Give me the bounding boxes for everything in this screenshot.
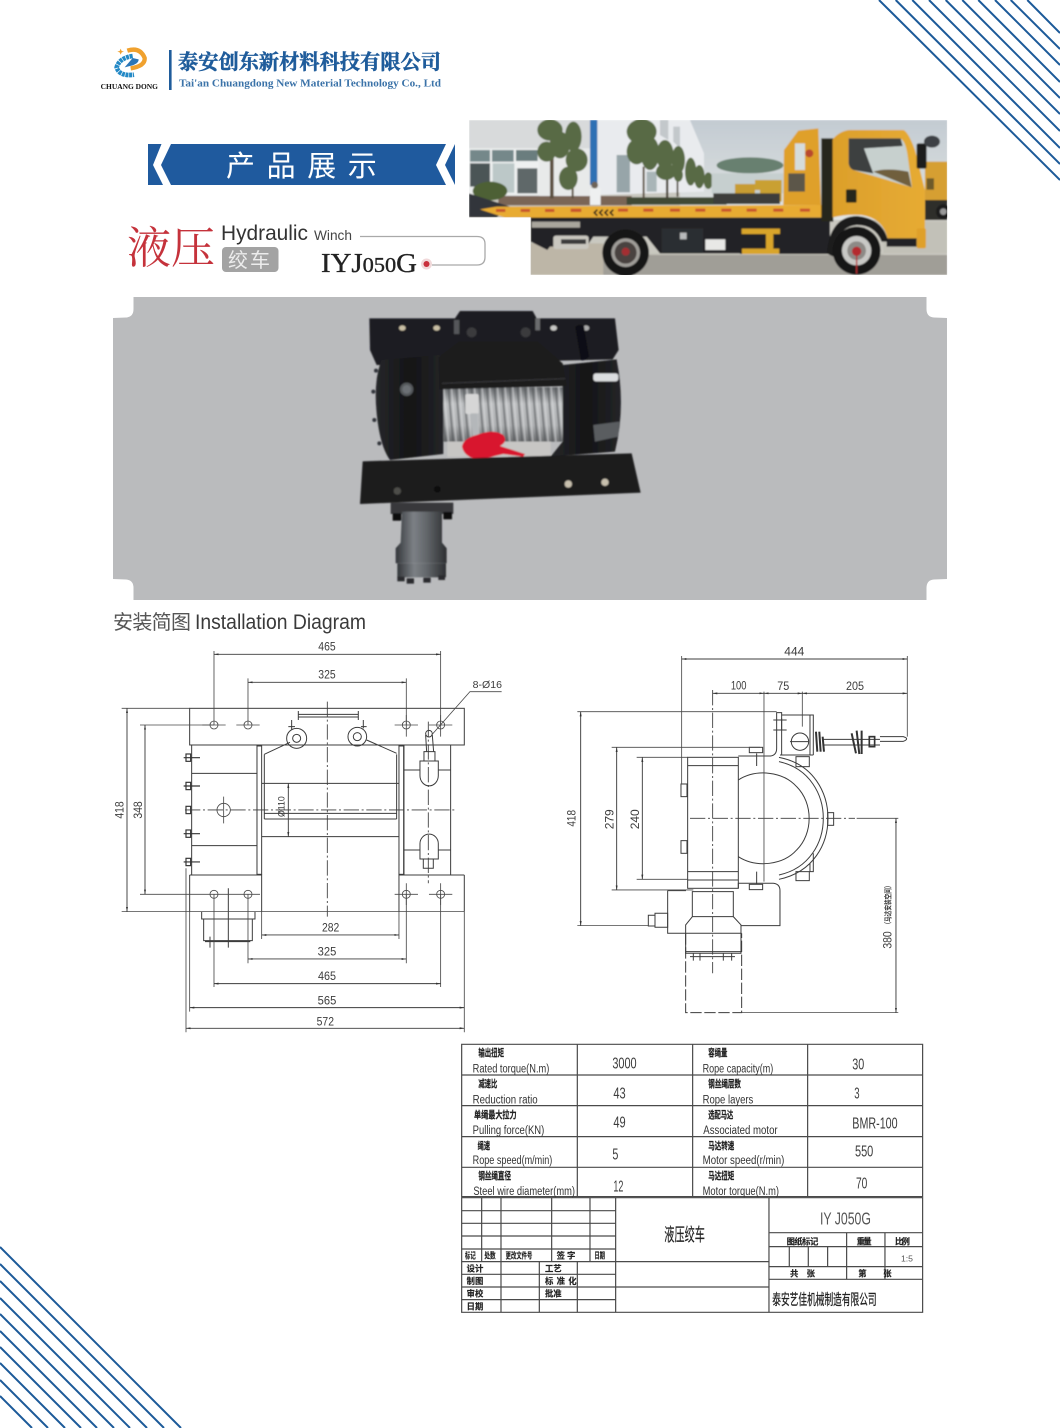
row: motor speed: 550 bbox=[855, 1144, 873, 1161]
centre lines bbox=[690, 690, 855, 973]
revision labels: 日期 bbox=[594, 1251, 605, 1261]
centre lines bbox=[185, 702, 455, 917]
factory building bbox=[469, 120, 727, 205]
panel: product photo background bbox=[113, 297, 947, 600]
revision labels: 处数 bbox=[484, 1251, 496, 1261]
logo wordmark: CHUANG DONG bbox=[101, 82, 158, 91]
row: rope capacity bbox=[703, 1047, 864, 1076]
row: rated torque: 3000 bbox=[612, 1055, 637, 1072]
dimension: 465 top: 465 bbox=[318, 641, 336, 654]
ground bbox=[926, 222, 947, 252]
row: steel wire diameter: 12 bbox=[613, 1179, 623, 1196]
heading: hydraulic winch bbox=[127, 222, 352, 273]
row: reduction ratio: 减速比 bbox=[478, 1077, 497, 1090]
row: motor torque: 70 bbox=[856, 1175, 867, 1192]
chassis bbox=[531, 217, 830, 254]
row: motor torque: 马达扭矩 bbox=[708, 1169, 734, 1182]
table grid bbox=[462, 1044, 923, 1197]
dimension: 418: 418 bbox=[114, 801, 127, 819]
row: associated motor: BMR-100 bbox=[852, 1115, 898, 1132]
manufacturer name: 泰安艺佳机械制造有限公司 bbox=[772, 1291, 877, 1308]
wire rope drum bbox=[440, 387, 564, 442]
row: steel wire diameter: Steel wire diameter(mm) bbox=[473, 1184, 575, 1198]
block headings: 图纸标记 bbox=[787, 1236, 819, 1246]
trees bbox=[473, 119, 783, 200]
cab gap bbox=[821, 138, 833, 222]
block headings bbox=[787, 1236, 913, 1279]
chart: side installation drawing bbox=[566, 645, 907, 1013]
section heading: installation diagram: 安装简图 bbox=[113, 611, 191, 634]
banner: product display: 产品展示 bbox=[226, 150, 388, 183]
row: rope layers bbox=[703, 1077, 860, 1106]
drum pivots and handle bbox=[287, 711, 367, 748]
dimension: 282 bbox=[262, 921, 399, 935]
row: rope layers: Rope layers bbox=[703, 1092, 753, 1106]
row: rope capacity: 30 bbox=[852, 1056, 864, 1073]
dimension: 465 bottom: 465 bbox=[318, 970, 336, 983]
company logo bbox=[101, 49, 158, 91]
row: rated torque bbox=[473, 1047, 637, 1076]
revision labels: 签字 bbox=[557, 1251, 575, 1261]
sign-off labels: 标准化 bbox=[545, 1276, 577, 1286]
heading: hydraulic winch: Winch bbox=[314, 227, 352, 243]
sign-off labels: 日期 bbox=[467, 1301, 483, 1311]
photo: hydraulic winch bbox=[360, 311, 641, 584]
row: rope speed bbox=[473, 1139, 618, 1167]
row: reduction ratio bbox=[473, 1077, 626, 1106]
row: motor speed bbox=[703, 1139, 873, 1167]
row: reduction ratio: Reduction ratio bbox=[473, 1092, 538, 1106]
icon: logo mark bbox=[117, 49, 145, 75]
truck cab bbox=[833, 130, 940, 248]
row: pulling force: Pulling force(KN) bbox=[473, 1123, 544, 1137]
background truck bbox=[925, 162, 951, 220]
decorative stripes: top right bbox=[879, 0, 1060, 180]
revision labels bbox=[465, 1251, 605, 1261]
heading: hydraulic winch: Hydraulic bbox=[221, 222, 308, 245]
top mounting plate bbox=[369, 311, 619, 365]
dimension: 110 diameter: Ø110 bbox=[277, 796, 287, 817]
dimension: 325 top: 325 bbox=[318, 669, 336, 682]
company name Chinese: 泰安创东新材料科技有限公司 bbox=[178, 51, 441, 74]
section heading: installation diagram: Installation Diagram bbox=[195, 611, 366, 634]
row: motor torque bbox=[703, 1169, 867, 1198]
dimension: 572: 572 bbox=[317, 1015, 334, 1028]
section heading: installation diagram bbox=[113, 611, 366, 634]
person bbox=[590, 182, 601, 205]
dimension: 380 motor space bbox=[882, 818, 896, 1013]
block headings: 共张 bbox=[790, 1269, 816, 1279]
hydraulic motor bbox=[391, 503, 453, 584]
revision labels: 更改文件号 bbox=[506, 1251, 532, 1261]
sign-off labels: 设计 bbox=[467, 1263, 484, 1273]
banner: product display bbox=[148, 144, 455, 185]
sign-off labels: 工艺 bbox=[545, 1263, 562, 1273]
row: rope speed: 绳速 bbox=[478, 1139, 490, 1152]
company name English: Tai'an Chuangdong New Material Technology Co., Ltd bbox=[179, 78, 441, 90]
drawing name: 液压绞车 bbox=[664, 1225, 705, 1245]
sign-off labels: 批准 bbox=[545, 1289, 562, 1299]
row: rope capacity: Rope capacity(m) bbox=[703, 1062, 773, 1076]
block headings: 1:5 bbox=[901, 1254, 913, 1264]
side lever bbox=[420, 730, 438, 868]
dimension: 444: 444 bbox=[784, 645, 805, 658]
block headings: 重量 bbox=[857, 1236, 872, 1246]
row: associated motor: 选配马达 bbox=[708, 1108, 734, 1121]
motor clearance envelope bbox=[686, 933, 742, 1013]
row: rope speed: Rope speed(m/min) bbox=[473, 1153, 552, 1167]
motor mount and motor bbox=[648, 891, 780, 961]
chart: front installation drawing bbox=[114, 641, 502, 1032]
extension lines bbox=[577, 656, 907, 1013]
centre bracket bbox=[439, 342, 567, 389]
lower mounting bar bbox=[360, 453, 641, 504]
dimension: 282: 282 bbox=[322, 921, 339, 934]
dimension: 240: 240 bbox=[629, 809, 642, 829]
parked car bbox=[469, 193, 510, 217]
row: rope layers: 3 bbox=[854, 1085, 860, 1102]
row: associated motor bbox=[703, 1108, 898, 1137]
motor outline bbox=[202, 888, 255, 948]
row: motor speed: 马达转速 bbox=[708, 1139, 735, 1152]
yellow side support bbox=[742, 229, 780, 254]
extension lines bbox=[122, 651, 464, 1032]
heading: hydraulic winch: 液压 bbox=[127, 224, 215, 273]
front wheel bbox=[827, 216, 888, 275]
left drum housing bbox=[371, 355, 443, 460]
brake lever bbox=[575, 324, 589, 360]
block headings: 比例 bbox=[895, 1236, 910, 1246]
row: steel wire diameter bbox=[473, 1169, 623, 1198]
dimension: 205 bbox=[802, 680, 907, 693]
distant yellow trucks bbox=[712, 173, 783, 204]
heading: hydraulic winch: 绞车 bbox=[228, 249, 272, 272]
block headings: 第张 bbox=[858, 1269, 892, 1279]
logo divider bar bbox=[169, 50, 172, 90]
row: rope layers: 钢丝绳层数 bbox=[708, 1077, 741, 1090]
side bolts bbox=[184, 754, 200, 866]
headboard bbox=[783, 128, 821, 205]
sign-off labels bbox=[467, 1263, 577, 1311]
sky bbox=[680, 120, 947, 220]
housing body bbox=[688, 713, 813, 926]
row: steel wire diameter: 钢丝绳直径 bbox=[478, 1169, 511, 1182]
mounting plates and body outline bbox=[190, 708, 464, 912]
dimension: 380 motor space: （马达安装空间） bbox=[883, 882, 893, 927]
dimension: 279: 279 bbox=[603, 809, 616, 829]
dimension: 75: 75 bbox=[777, 680, 789, 693]
row: associated motor: Associated motor bbox=[703, 1123, 778, 1137]
right drum housing bbox=[551, 359, 621, 457]
row: pulling force: 单绳最大拉力 bbox=[474, 1108, 517, 1121]
rope end and ferrule bbox=[465, 394, 480, 457]
revision labels: 标记 bbox=[465, 1251, 476, 1261]
dimension: 205: 205 bbox=[846, 680, 864, 693]
sign-off labels: 制图 bbox=[467, 1276, 483, 1286]
dimension: 110 diameter bbox=[277, 783, 288, 837]
row: motor torque: Motor torque(N.m) bbox=[703, 1184, 779, 1198]
model label with callout line: IYJ050G bbox=[321, 248, 417, 278]
housing bolts bbox=[681, 718, 834, 890]
decorative stripes: bottom left bbox=[0, 1247, 181, 1428]
mounting holes bbox=[202, 715, 452, 905]
title block grid bbox=[462, 1198, 923, 1312]
dimension: 325 bottom: 325 bbox=[318, 946, 336, 959]
dimension: 380 motor space: 380 bbox=[882, 931, 895, 949]
handle rod bbox=[790, 731, 907, 754]
flatbed deck bbox=[480, 205, 822, 218]
row: motor speed: Motor speed(r/min) bbox=[703, 1153, 784, 1167]
model label with callout line bbox=[321, 236, 485, 278]
dimension: 240 bbox=[629, 757, 642, 879]
dimension: 348: 348 bbox=[132, 801, 145, 819]
dimension: hole leader 8-16 bbox=[432, 680, 502, 735]
red shackle bbox=[462, 432, 525, 459]
dimension: 100: 100 bbox=[731, 680, 747, 693]
row: pulling force: 49 bbox=[613, 1114, 626, 1131]
dimension: 100 bbox=[713, 680, 764, 693]
row: rated torque: Rated torque(N.m) bbox=[473, 1062, 549, 1076]
cradle arc bbox=[738, 757, 828, 879]
row: reduction ratio: 43 bbox=[613, 1085, 626, 1102]
table: technical parameters bbox=[462, 1044, 923, 1198]
row: rated torque: 输出扭矩 bbox=[478, 1047, 504, 1060]
rear wheel bbox=[602, 229, 649, 276]
table: drawing title block bbox=[462, 1198, 923, 1312]
dimension: 418: 418 bbox=[566, 810, 579, 827]
gap under drum bbox=[447, 442, 551, 457]
dimension: 565: 565 bbox=[318, 994, 336, 1007]
sign-off labels: 审校 bbox=[467, 1289, 484, 1299]
model number: IY J050G bbox=[820, 1208, 871, 1228]
row: rope speed: 5 bbox=[612, 1146, 618, 1163]
dimension: hole leader 8-16: 8-Ø16 bbox=[473, 680, 502, 691]
row: rope capacity: 容绳量 bbox=[708, 1047, 727, 1060]
dimension: 75 bbox=[764, 680, 802, 693]
photo: flatbed tow truck bbox=[469, 119, 951, 276]
row: pulling force bbox=[473, 1108, 626, 1137]
